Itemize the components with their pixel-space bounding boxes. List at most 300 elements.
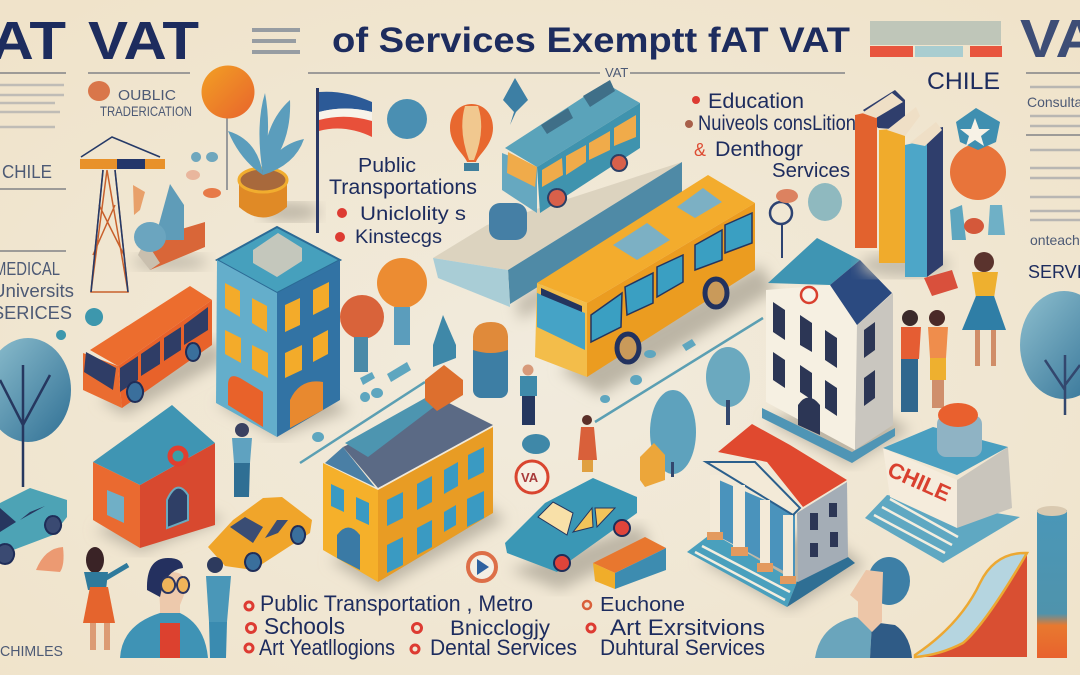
crown (0, 338, 71, 442)
child left legs (901, 359, 918, 412)
sign text: VA (521, 470, 539, 485)
left wall (216, 260, 277, 437)
building shadow (765, 400, 910, 465)
cylinder cap (473, 322, 508, 353)
roof teal (768, 238, 860, 285)
right windows (864, 322, 875, 406)
roof vents (541, 80, 615, 134)
person blue by house (232, 423, 252, 497)
bus shadow (560, 265, 775, 395)
slide lane (915, 553, 1027, 657)
schools: Schools (264, 613, 345, 639)
column bases (707, 532, 796, 584)
windshield (84, 352, 116, 390)
face (850, 570, 883, 605)
left blue car (0, 488, 67, 564)
front wheel (554, 555, 570, 571)
label: CHILE right: CHILE (927, 68, 1000, 95)
house shadow (95, 500, 225, 552)
orange blob (776, 189, 798, 203)
platform front (508, 162, 682, 304)
shoulders right (870, 622, 912, 658)
right windows upper (387, 447, 484, 526)
windows left (225, 283, 268, 378)
roof box (253, 233, 302, 277)
left wall (323, 463, 378, 582)
woman with card (924, 252, 1006, 366)
denthogs: Denthogr (715, 138, 803, 161)
card (924, 270, 958, 296)
scattered decorative blobs: left (186, 152, 221, 198)
red blob (964, 218, 984, 234)
torso (232, 438, 252, 463)
child right body (928, 327, 948, 358)
kinstecgs: Kinstecgs (355, 227, 442, 248)
destination sign (541, 288, 582, 312)
slide (915, 553, 1027, 657)
side windows (542, 115, 636, 187)
person near bus (520, 364, 537, 425)
torso (84, 572, 108, 590)
teal dots left (56, 308, 103, 340)
bullet art yeat (245, 644, 253, 652)
yellow taxi (208, 497, 312, 571)
roof navy (830, 260, 892, 325)
tree center (650, 390, 696, 477)
right wall (797, 482, 848, 582)
legs (234, 463, 250, 497)
CHILE sign building (865, 403, 1020, 563)
man with glasses (120, 558, 208, 658)
red roof (718, 424, 847, 507)
church with yellow building (323, 315, 505, 590)
orange lollipop trees (340, 258, 427, 372)
grey block (138, 240, 160, 270)
star badge and orange sphere (950, 108, 1006, 200)
blue rock 2 (134, 222, 166, 252)
wheels (245, 526, 305, 571)
yellow book spine (879, 128, 905, 263)
eluchone: Euchone (600, 594, 685, 616)
bullet (685, 120, 693, 128)
child right shorts (930, 358, 946, 380)
wheels (127, 343, 200, 402)
front (83, 353, 122, 408)
red book pages (862, 93, 903, 118)
red book top cover (863, 90, 905, 130)
small icon cluster right (950, 205, 1005, 240)
orange block (145, 222, 205, 270)
head (974, 252, 994, 272)
orange balloon (202, 66, 254, 190)
chimney cap (938, 403, 978, 427)
platform shadow (515, 195, 700, 320)
panel: right banner strip (870, 21, 1002, 57)
crane jib (80, 159, 165, 169)
teal and terracotta blobs (191, 152, 218, 162)
woman in red skirt (83, 547, 128, 650)
slide body (915, 553, 1027, 657)
right (615, 548, 666, 589)
small tree by white building (706, 347, 750, 425)
panel: public transport small label (88, 81, 192, 119)
small blue sphere (387, 99, 427, 139)
art yeatlogions: Art Yeatllogions (259, 635, 395, 660)
window (107, 490, 124, 523)
plant shadow (260, 203, 320, 221)
triangle (477, 559, 489, 575)
bullet dental (411, 645, 419, 653)
crane jib orange ends (80, 159, 165, 169)
right tree (1020, 291, 1080, 415)
left windows (331, 484, 369, 525)
VAT sign (516, 461, 548, 493)
faint text lines (0, 85, 64, 127)
crown (650, 390, 696, 474)
flag pole (316, 88, 319, 233)
neck and face (158, 572, 186, 625)
door (167, 488, 188, 528)
platform top (433, 162, 682, 270)
small orange shell (36, 547, 64, 572)
top (593, 537, 666, 573)
scattered blobs along road (312, 339, 696, 442)
platform end (433, 258, 510, 307)
panel: left column text (0, 85, 74, 660)
top (217, 227, 340, 293)
sphere (950, 144, 1006, 200)
bullet schools (246, 624, 256, 632)
rock and blocks cluster (132, 184, 208, 270)
blue building (216, 227, 350, 437)
faint text lines (1030, 87, 1080, 220)
yellow bus (535, 175, 775, 395)
spire (433, 315, 456, 367)
blue book pages (910, 122, 942, 146)
orange blob 2 (203, 188, 221, 198)
orange and blue cargo box (593, 537, 666, 589)
door (337, 528, 360, 570)
side (537, 103, 640, 213)
side (587, 203, 755, 377)
title: VAT: VAT (88, 11, 199, 71)
dental services: Dental Services (430, 635, 577, 660)
front (535, 283, 587, 377)
cylinder body (473, 330, 508, 398)
jacket (120, 613, 208, 658)
bank shadow (700, 530, 865, 610)
legs (975, 330, 996, 366)
tree sphere (340, 295, 384, 339)
tree trunk (354, 337, 368, 372)
title (0, 9, 1080, 80)
services: Services (772, 160, 850, 182)
subtitle VAT: VAT (605, 65, 628, 80)
roof (343, 400, 493, 488)
panel: right column text (1027, 87, 1080, 282)
teal blob 2 (988, 205, 1005, 235)
right wall (140, 443, 215, 548)
label line 2: TRADERICATION (100, 103, 192, 119)
heading block: education (685, 90, 856, 182)
trunk (0, 365, 50, 487)
child right head (929, 310, 945, 326)
building shadow (216, 380, 350, 437)
header divider lines (0, 73, 1080, 251)
label line 1: OUBLIC (118, 87, 176, 104)
trunk (671, 462, 674, 477)
door (798, 398, 820, 435)
roof (90, 286, 212, 366)
head (582, 415, 592, 425)
balloon stripes (462, 106, 481, 160)
front wheel (617, 334, 639, 362)
legs (90, 623, 110, 650)
top (883, 427, 1008, 475)
tree sphere 2 (377, 258, 427, 308)
cluster shadow (132, 254, 208, 270)
child left head (902, 310, 918, 326)
man in overalls (206, 557, 231, 658)
leaves (228, 93, 304, 175)
door right (290, 381, 323, 428)
head (207, 557, 223, 573)
teal block beside bus (489, 203, 527, 240)
legs (209, 622, 227, 658)
left wall (883, 448, 957, 528)
orange bus (83, 286, 225, 415)
two children (901, 310, 948, 412)
flag (316, 88, 372, 233)
star (960, 118, 990, 146)
windshield (538, 502, 573, 535)
hair (868, 557, 910, 605)
right wall (277, 260, 340, 437)
classical bank building (687, 424, 865, 610)
red book spine (855, 110, 877, 248)
balloon envelope (450, 104, 493, 162)
right wall (957, 447, 1012, 528)
red bar right (970, 46, 1002, 57)
left (593, 563, 615, 589)
side windows (120, 307, 208, 392)
teal blob (950, 205, 966, 240)
windows (0, 506, 45, 532)
icon: potted plant (228, 93, 320, 221)
body (505, 478, 637, 572)
gable (325, 447, 375, 487)
bus shadow (100, 340, 225, 415)
roof hatch (613, 223, 670, 260)
label: CHILE: CHILE (2, 162, 52, 182)
building shadow (330, 500, 505, 590)
blue cylinder (473, 322, 508, 398)
flag white (319, 108, 372, 121)
lantern icon (503, 78, 528, 125)
trunk (1045, 355, 1080, 415)
rear wheel (614, 520, 630, 536)
balloon basket (464, 163, 479, 171)
rear wheel (705, 279, 727, 307)
education: Education (708, 90, 804, 113)
consultation: Nuiveols consLition (698, 112, 856, 135)
glasses (161, 577, 189, 593)
enicology: Bnicclogjy (450, 617, 551, 640)
blob group by magnifier (770, 183, 842, 258)
chimney base (937, 415, 982, 457)
child left body (901, 327, 921, 359)
ring (468, 553, 496, 581)
orange small bag (640, 443, 665, 487)
windows right (285, 282, 329, 378)
pot rim (239, 168, 287, 192)
bullet enicology (412, 624, 422, 632)
base steps (865, 495, 1020, 563)
tower (425, 365, 463, 411)
flag red (319, 117, 372, 137)
crane mast (91, 170, 128, 292)
base (762, 408, 895, 463)
pediment (706, 462, 800, 515)
book shadow (860, 253, 950, 277)
badge (956, 108, 1000, 150)
pillar right (1037, 506, 1067, 658)
art exhibitions: Art Exrsitvions (610, 615, 765, 640)
wall windows (810, 503, 838, 557)
torso (206, 576, 231, 622)
blue book spine (905, 140, 927, 277)
public: Public (358, 155, 416, 177)
steps (687, 533, 797, 607)
flag blue (319, 92, 372, 112)
white building (762, 238, 910, 465)
skirt (962, 296, 1006, 330)
bullet row 1 (245, 602, 253, 610)
magnifier ring (770, 202, 792, 224)
windshield (537, 293, 585, 350)
roof (537, 175, 755, 303)
magnifier stem (781, 224, 783, 258)
strip image (870, 21, 1001, 45)
clock (801, 287, 817, 303)
legs (582, 460, 593, 472)
dress (578, 427, 597, 460)
windshield (230, 517, 263, 543)
step stripes (874, 499, 958, 553)
bullet art (587, 624, 595, 632)
plant pot (239, 180, 287, 218)
head (235, 423, 249, 437)
roof (93, 405, 215, 485)
top small text block (252, 30, 300, 52)
books (855, 90, 950, 277)
trunk (726, 400, 730, 425)
transportations: Transportations (329, 176, 477, 199)
bullet (335, 232, 345, 242)
hair (86, 547, 104, 573)
blue car (505, 478, 650, 590)
skirt (83, 587, 115, 623)
roof (505, 83, 640, 167)
dultural services: Duhtural Services (600, 635, 765, 660)
front (502, 153, 537, 213)
child right legs (932, 380, 944, 408)
side window (265, 520, 288, 538)
body (208, 497, 312, 570)
teal bar (915, 46, 963, 57)
car shadow (510, 525, 650, 590)
play button icon (468, 553, 496, 581)
shirt (160, 623, 180, 658)
label: medical: onteach (1030, 232, 1080, 248)
legs (522, 396, 535, 425)
blue orange blob (808, 183, 842, 221)
wheel (0, 516, 61, 564)
head (522, 364, 534, 376)
bottom service list (245, 591, 765, 660)
columns (710, 475, 793, 580)
left wall (766, 285, 857, 450)
balloon ball (202, 66, 254, 118)
side windows (573, 508, 615, 532)
red bar left (870, 46, 913, 57)
concrete platform under buses (433, 162, 700, 320)
neck (858, 600, 882, 632)
tree trunk 2 (394, 307, 410, 345)
pillar cap (1037, 506, 1067, 516)
hot air balloon (450, 104, 493, 171)
title: main heading: of Services Exemptt fAT VAT (332, 21, 850, 60)
arm (106, 565, 128, 578)
orange blob (186, 170, 200, 180)
shoulders left (815, 617, 872, 658)
right wall (378, 427, 493, 582)
hair (147, 558, 183, 597)
crown (706, 347, 750, 407)
roof ridge (345, 397, 443, 457)
step side (787, 557, 855, 607)
icon: small blob (88, 81, 110, 101)
crane outline (81, 137, 160, 292)
ampersand: & (694, 140, 706, 160)
wheels (548, 155, 627, 207)
small blue pebble (522, 434, 550, 454)
unicloloitys: Uniclolity s (360, 204, 466, 225)
heading block: public transportations (329, 155, 477, 248)
right wall (855, 293, 893, 450)
crane (80, 137, 165, 292)
sign ring (516, 461, 548, 493)
red school house (93, 405, 225, 552)
bullet (692, 96, 700, 104)
crown (1020, 291, 1080, 399)
right windows lower (387, 491, 484, 573)
pillar body (1037, 510, 1067, 658)
blue bus (502, 80, 640, 213)
blue wall behind columns (712, 477, 795, 577)
woman looking up (815, 557, 912, 658)
body (0, 488, 67, 555)
left tree (0, 338, 71, 487)
side windows (591, 213, 752, 342)
badge (170, 448, 186, 464)
left windows (773, 302, 837, 416)
label: bottom left: CHIMLES (0, 643, 63, 660)
road lines (300, 318, 763, 463)
bullet (583, 601, 591, 609)
blue rock (156, 184, 184, 240)
orange shard (133, 185, 145, 215)
